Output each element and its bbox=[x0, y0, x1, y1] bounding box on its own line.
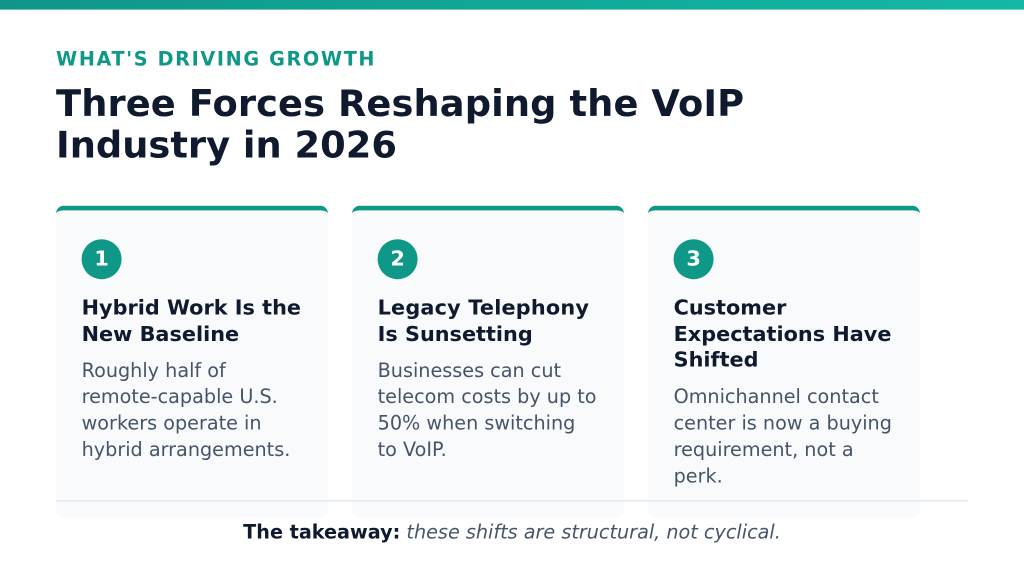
card 2 body text bbox=[378, 359, 597, 461]
card 1 heading: Hybrid Work Is the bbox=[82, 296, 301, 320]
takeaway callout: The takeaway: these shifts are structural, not cyclical. bbox=[243, 521, 781, 543]
panel: card 2 legacy telephony bbox=[352, 206, 624, 518]
card 3 heading bbox=[674, 296, 891, 372]
card 1 body text: hybrid arrangements. bbox=[82, 438, 290, 461]
card 2 heading: Is Sunsetting bbox=[378, 322, 533, 346]
top gradient bar bbox=[0, 0, 1024, 10]
card 3 body text: Omnichannel contact bbox=[674, 386, 879, 408]
card 2 heading bbox=[378, 296, 589, 346]
eyebrow heading: WHAT'S DRIVING GROWTH bbox=[56, 48, 376, 70]
card 2 body text: to VoIP. bbox=[378, 438, 447, 461]
card 2 body text: telecom costs by up to bbox=[378, 386, 597, 408]
icon: number 3 badge: 3 bbox=[686, 247, 701, 271]
card 1 heading: New Baseline bbox=[82, 322, 239, 346]
card 3 body text: requirement, not a bbox=[674, 438, 854, 461]
card 3 body text: center is now a buying bbox=[674, 412, 892, 434]
card 3 heading: Customer bbox=[674, 296, 786, 320]
card 2 body text: 50% when switching bbox=[378, 412, 575, 434]
card 1 body text bbox=[82, 359, 290, 461]
icon: number 1 badge bbox=[82, 239, 122, 279]
card 3 heading: Expectations Have bbox=[674, 322, 891, 346]
card 3 body text: perk. bbox=[674, 465, 723, 487]
card 2 body text: Businesses can cut bbox=[378, 359, 561, 382]
icon: number 3 badge bbox=[674, 239, 714, 279]
icon: number 2 badge: 2 bbox=[390, 247, 405, 271]
card 1 body text: workers operate in bbox=[82, 412, 262, 434]
title: Three Forces Reshaping the VoIP bbox=[56, 82, 744, 125]
card 1 heading bbox=[82, 296, 301, 346]
card 3 heading: Shifted bbox=[674, 348, 759, 372]
icon: number 2 badge bbox=[378, 239, 418, 279]
icon: number 1 badge: 1 bbox=[94, 247, 109, 271]
card 1 body text: remote-capable U.S. bbox=[82, 386, 278, 408]
title bbox=[56, 82, 744, 166]
panel: card 1 hybrid work bbox=[56, 206, 328, 518]
card 3 body text bbox=[674, 386, 892, 487]
panel: card 3 customer expectations bbox=[648, 206, 920, 518]
card 1 body text: Roughly half of bbox=[82, 359, 226, 382]
title: Industry in 2026 bbox=[56, 123, 397, 166]
card 2 heading: Legacy Telephony bbox=[378, 296, 589, 320]
